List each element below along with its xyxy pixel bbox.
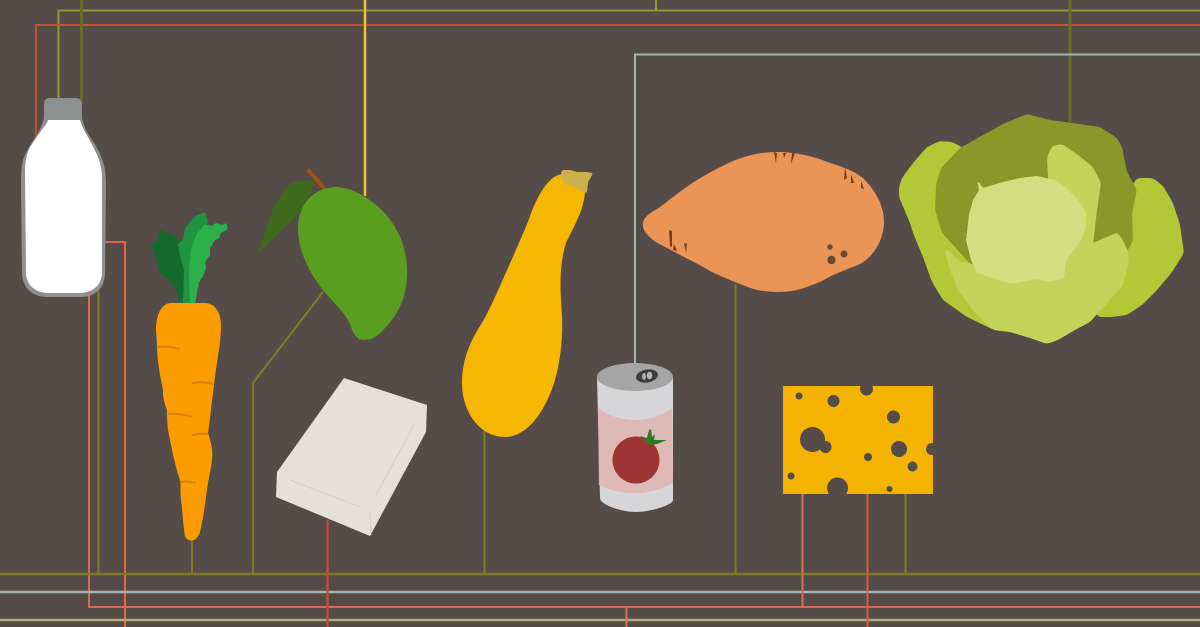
cabbage front leaf	[943, 232, 1129, 344]
mango body	[298, 187, 407, 340]
icon: swiss cheese	[783, 382, 938, 498]
carrot leaves	[150, 212, 228, 304]
icon: cabbage	[899, 114, 1184, 344]
mango stem	[309, 171, 323, 187]
squash body	[462, 174, 585, 437]
can pull tab	[635, 368, 659, 384]
can label	[598, 408, 673, 493]
icon: tomato can	[597, 363, 673, 512]
tomato	[612, 429, 667, 484]
icon: carrot	[150, 212, 228, 541]
cabbage upper leaf	[1047, 144, 1101, 262]
sweet potato marks	[669, 152, 864, 264]
icon: tofu block	[276, 378, 427, 536]
cabbage heart	[966, 176, 1086, 284]
can lid	[597, 363, 673, 391]
squash stem	[560, 170, 593, 193]
icon: sweet potato	[643, 152, 884, 292]
icon: mango	[255, 171, 407, 340]
can body	[597, 377, 673, 512]
cabbage outer leaves	[899, 141, 1184, 331]
cabbage dark leaves	[935, 114, 1137, 280]
carrot root	[156, 303, 221, 541]
icon: yellow squash	[462, 170, 593, 437]
mango leaf	[255, 180, 315, 257]
cheese holes	[788, 382, 938, 498]
icon: milk bottle	[21, 98, 106, 297]
